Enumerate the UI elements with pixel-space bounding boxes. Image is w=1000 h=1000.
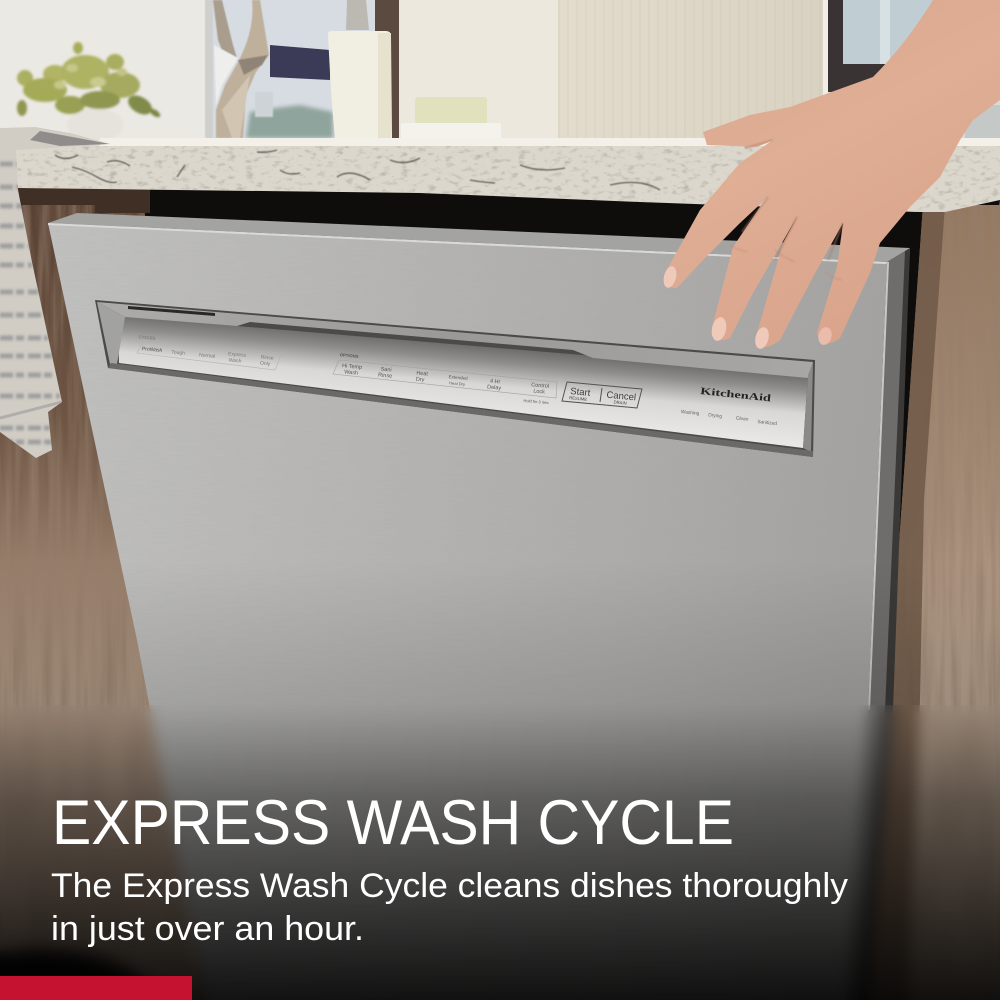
panel labels: options: Wash — [344, 369, 358, 377]
panel labels: options: Delay — [487, 384, 502, 392]
finger nails — [662, 265, 678, 289]
door top face — [48, 213, 910, 262]
panel labels: cycles: CYCLES — [138, 334, 156, 341]
panel labels: options: Heat — [416, 371, 429, 378]
panel labels: options: Hi Temp — [342, 363, 362, 371]
panel labels: cycles: Rinse — [260, 354, 274, 362]
start and cancel buttons — [562, 382, 642, 408]
bottom gradient overlay — [0, 705, 1000, 1000]
panel labels: options: Control — [531, 382, 549, 390]
panel labels: options: Lock — [533, 389, 545, 396]
panel labels: cycles: Normal — [199, 352, 215, 360]
soap on dish — [401, 97, 501, 140]
door corner bevel — [868, 262, 889, 710]
description text: in just over an hour. — [51, 910, 364, 948]
control panel recess — [95, 300, 815, 457]
panel labels: cycles: Express — [228, 351, 247, 359]
panel labels: options: Sani — [380, 367, 392, 373]
dark opening under counter — [145, 186, 1000, 1000]
status labels: Washing — [681, 409, 700, 417]
panel labels: cycles: Tough — [171, 349, 185, 357]
panel labels: options: Dry — [416, 377, 425, 383]
status labels: Drying — [708, 412, 723, 420]
panel labels: options: Hold for 3 Sec — [523, 398, 549, 405]
description text — [51, 867, 848, 948]
panel right wedge — [803, 362, 813, 452]
hand — [662, 0, 1000, 350]
status labels: Sanitized — [757, 419, 778, 427]
faucet — [205, 0, 269, 138]
dish towel — [0, 120, 115, 465]
start and cancel buttons: RESUME — [569, 395, 588, 402]
dishwasher door — [48, 213, 910, 1000]
brand logo: KitchenAid — [700, 386, 772, 404]
shadow under left counter — [18, 186, 150, 213]
lower door shading — [0, 560, 1000, 705]
panel labels: cycles — [137, 334, 282, 370]
dark corner shape — [0, 950, 150, 1000]
panel labels: options: Extended — [448, 374, 468, 381]
panel labels: options: 4 Hr — [490, 379, 501, 385]
description text: The Express Wash Cycle cleans dishes thoroughly — [51, 867, 848, 905]
finger shading — [742, 140, 843, 260]
start and cancel buttons: Cancel — [606, 390, 636, 403]
countertop — [15, 138, 1000, 212]
panel labels: cycles: Wash — [229, 357, 242, 365]
panel upper lip — [97, 302, 813, 378]
plant — [17, 42, 162, 142]
door side strip — [847, 248, 910, 1000]
soap dispenser — [328, 0, 392, 138]
heading: EXPRESS WASH CYCLE — [52, 788, 734, 858]
panel labels: options: OPTIONS — [340, 352, 359, 359]
panel labels: options — [333, 352, 557, 405]
start and cancel buttons: DRAIN — [613, 399, 627, 406]
panel left wedge — [97, 302, 125, 364]
panel labels: cycles: Only — [260, 361, 271, 367]
start and cancel buttons: Start — [570, 386, 591, 399]
status labels — [681, 409, 778, 427]
panel labels: options: Rinse — [378, 372, 392, 380]
panel labels: options: Heat Dry — [449, 380, 465, 387]
panel labels: cycles: ProWash — [142, 346, 163, 354]
dark wood strip — [861, 205, 945, 1000]
right wood cabinet — [861, 205, 1000, 1000]
background wall and window — [0, 0, 1000, 215]
left wood cabinet — [0, 185, 300, 1000]
counter veins — [55, 150, 660, 190]
red accent bar — [0, 976, 192, 1000]
status labels: Clean — [736, 415, 749, 423]
